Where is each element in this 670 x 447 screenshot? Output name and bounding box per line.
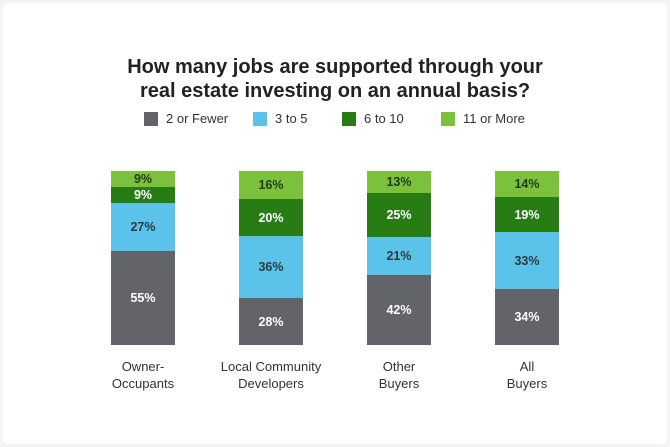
bar: owner-occupants: 9%	[134, 188, 152, 202]
bar: other buyers: 25%	[386, 208, 412, 222]
bar: all buyers: 33%	[514, 254, 540, 268]
legend: 6 to 10	[364, 111, 404, 126]
legend: 2 or Fewer	[166, 111, 228, 126]
bar: other buyers: 21%	[386, 249, 412, 263]
bar: owner-occupants	[111, 171, 175, 345]
bar: all buyers	[495, 171, 559, 345]
bar: all buyers: 19%	[514, 208, 540, 222]
title: real estate investing on an annual basis?	[140, 80, 530, 102]
bar: all buyers: 34%	[514, 310, 540, 324]
bar: local community developers: 20%	[258, 210, 284, 224]
title: How many jobs are supported through your	[127, 56, 543, 78]
axis labels: Local Community	[221, 359, 321, 374]
bar: all buyers: 14%	[514, 177, 540, 191]
axis labels: All	[520, 359, 534, 374]
bar: owner-occupants: 27%	[130, 220, 156, 234]
axis labels: Developers	[238, 376, 304, 391]
bar: other buyers: 13%	[386, 175, 412, 189]
bar: local community developers: 28%	[258, 314, 284, 328]
axis labels: Owner-	[122, 359, 164, 374]
axis labels	[112, 359, 547, 391]
legend: 11 or More	[463, 111, 525, 126]
legend	[144, 111, 525, 126]
bar: local community developers: 16%	[258, 178, 284, 192]
axis labels: Occupants	[112, 376, 174, 391]
bar: owner-occupants: 55%	[130, 291, 156, 305]
axis labels: Other	[383, 359, 415, 374]
bar: other buyers	[367, 171, 431, 345]
title	[127, 56, 543, 102]
bar: owner-occupants: 9%	[134, 172, 152, 186]
axis labels: Buyers	[507, 376, 547, 391]
bar: other buyers: 42%	[386, 303, 412, 317]
legend: 3 to 5	[275, 111, 308, 126]
axis labels: Buyers	[379, 376, 419, 391]
bar: local community developers: 36%	[258, 260, 284, 274]
bar: local community developers	[239, 171, 303, 345]
